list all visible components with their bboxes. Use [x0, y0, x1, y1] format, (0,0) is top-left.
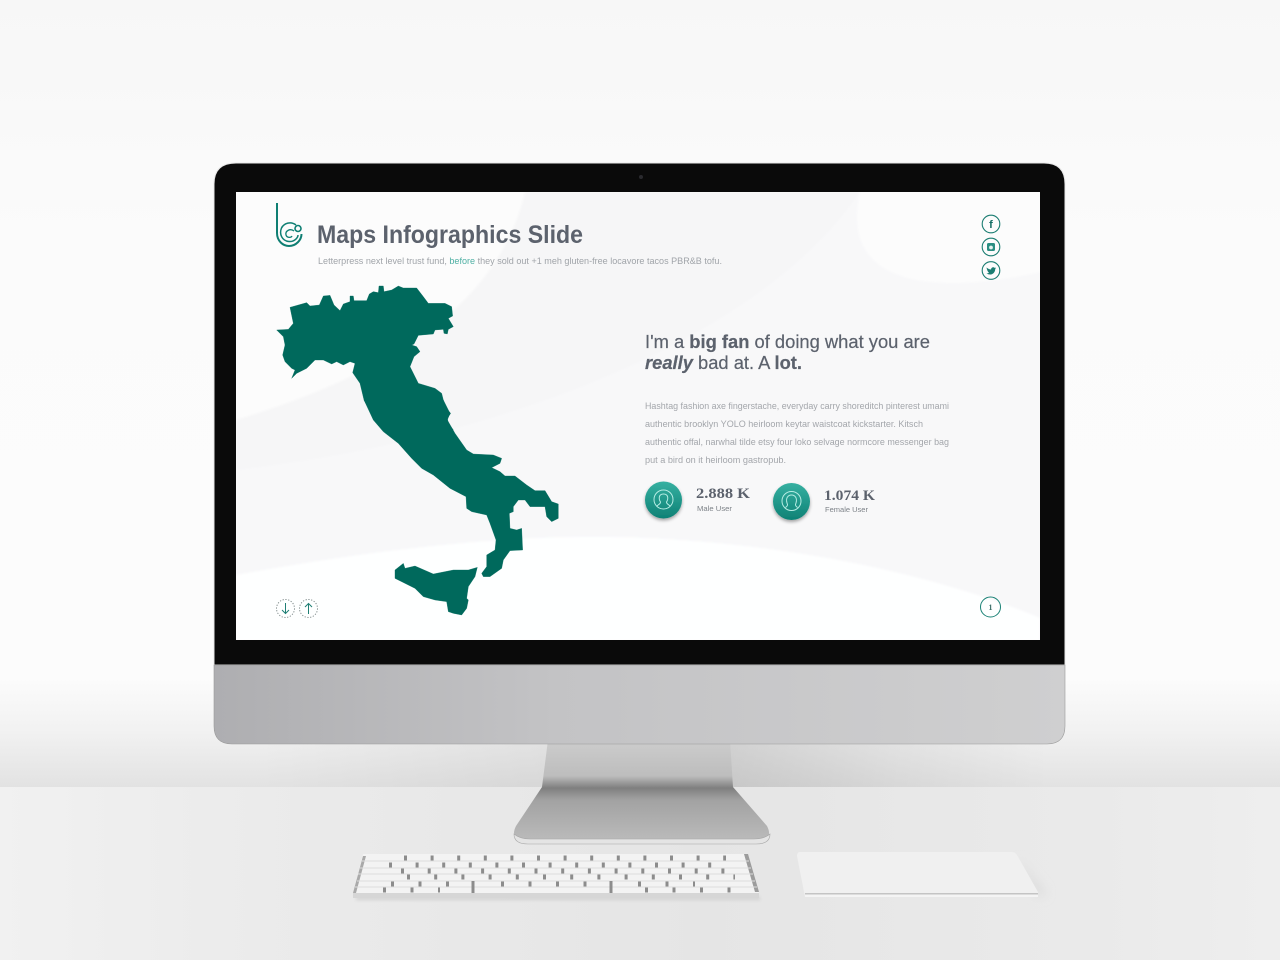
- monitor: [214, 163, 1065, 744]
- page number: [980, 597, 1000, 617]
- keyboard: [353, 854, 760, 900]
- social icons: [982, 215, 1000, 279]
- body text: authentic offal, narwhal tilde etsy four loko selvage normcore messenger bag: [645, 437, 949, 447]
- headline: [645, 331, 930, 373]
- page number: 1: [988, 603, 992, 612]
- value: male users: 2.888 K: [696, 486, 750, 502]
- Sicily: [395, 563, 477, 615]
- stat: male users: [645, 482, 750, 518]
- monitor bezel: [214, 163, 1065, 665]
- mainland: [277, 286, 453, 430]
- icon: twitter: [982, 262, 1000, 279]
- headline: really bad at. A lot.: [645, 352, 802, 373]
- webcam: [639, 175, 643, 179]
- arrow: up: [300, 600, 318, 618]
- body text: authentic brooklyn YOLO heirloom keytar waistcoat kickstarter. Kitsch: [645, 419, 923, 429]
- slide screen: [236, 192, 1050, 640]
- title: Maps Infographics Slide: [317, 221, 583, 249]
- icon: male user: [645, 482, 682, 518]
- trackpad: [797, 852, 1046, 897]
- label: female users: Female User: [825, 505, 868, 514]
- body text: [645, 401, 949, 465]
- icon: female user: [773, 483, 810, 520]
- icon: facebook: f: [989, 219, 993, 231]
- body text: Hashtag fashion axe fingerstache, everyday carry shoreditch pinterest umami: [645, 401, 949, 411]
- southern peninsula: [364, 400, 558, 577]
- body text: put a bird on it heirloom gastropub.: [645, 455, 786, 465]
- stat: female users: [773, 483, 875, 520]
- logo: [277, 203, 302, 246]
- arrow: down: [276, 600, 294, 618]
- value: female users: 1.074 K: [824, 488, 875, 504]
- label: male users: Male User: [697, 504, 733, 513]
- background: desk: [0, 787, 1280, 960]
- monitor stand: [514, 740, 770, 844]
- map of Italy: [277, 286, 558, 615]
- headline: I'm a big fan of doing what you are: [645, 331, 930, 352]
- navigation arrows: [276, 600, 318, 618]
- monitor chin: [214, 665, 1065, 744]
- subtitle: Letterpress next level trust fund, before they sold out +1 meh gluten-free locavore tacos PBR&B tofu.: [318, 256, 722, 267]
- icon: instagram: [982, 238, 1000, 256]
